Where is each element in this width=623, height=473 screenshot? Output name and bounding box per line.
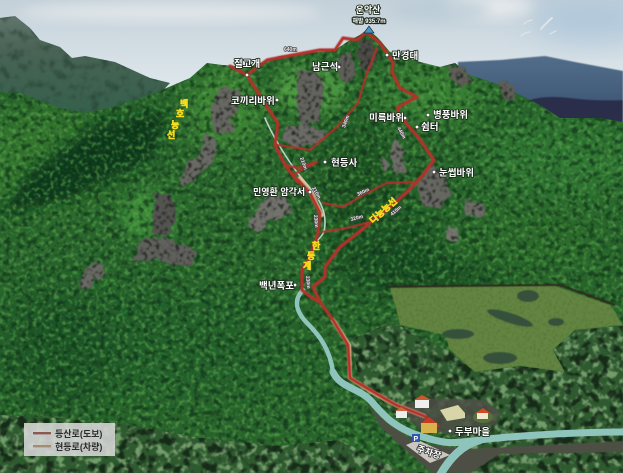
label: west ridge bbox=[167, 98, 188, 140]
rock: eyebrow rock bbox=[418, 164, 452, 208]
rock: east ledges bbox=[465, 200, 486, 216]
label: 민영환 암각서: 민영환 암각서 bbox=[253, 186, 305, 197]
rock: western crag upper bbox=[152, 194, 177, 236]
rock: temple crag bbox=[248, 196, 292, 232]
rock: left crag bbox=[178, 135, 218, 188]
label: course 1 bbox=[303, 240, 321, 271]
label: 쉼터: 쉼터 bbox=[421, 121, 438, 133]
label: 두부마을: 두부마을 bbox=[455, 427, 490, 438]
rock: small lower crag bbox=[78, 263, 104, 290]
distant mountain: right bbox=[458, 56, 623, 125]
sky bbox=[0, 0, 623, 140]
rock: elephant rock cluster bbox=[210, 88, 242, 134]
lowland forest bbox=[0, 322, 623, 473]
label: 남근석: 남근석 bbox=[312, 61, 338, 73]
label: 눈썹바위: 눈썹바위 bbox=[439, 167, 474, 179]
legend item: hiking trail: 등산로(도보) bbox=[55, 428, 102, 439]
rock: summit face bbox=[358, 40, 378, 72]
icon: birds bbox=[521, 18, 556, 36]
house: east bbox=[473, 408, 493, 423]
trail: temple spur bbox=[285, 162, 317, 182]
label: 쉼터 bbox=[415, 121, 438, 133]
trail distance labels: 340m bbox=[341, 114, 351, 129]
road: vehicle route bbox=[300, 178, 424, 416]
village ground and roads bbox=[368, 398, 623, 473]
terrain light and shadow bbox=[0, 65, 623, 410]
peak: summit marker: 해발 935.7m bbox=[352, 17, 386, 25]
icon: parking sign: P bbox=[414, 436, 418, 443]
label: course 1: 계 bbox=[303, 260, 311, 271]
rock: pinnacle bbox=[390, 138, 405, 172]
peak: summit marker: 운악산 bbox=[356, 4, 381, 15]
trail distance labels: 230m bbox=[304, 276, 311, 289]
label: 현등사: 현등사 bbox=[331, 157, 357, 169]
rock: ridge crag bbox=[448, 66, 472, 88]
trail distance labels: 320m bbox=[350, 214, 364, 223]
label: 코끼리바위: 코끼리바위 bbox=[231, 95, 275, 107]
rock: central columns bbox=[296, 70, 324, 126]
trail: western descent bbox=[247, 75, 298, 182]
rock: far ridge crag bbox=[498, 80, 516, 102]
trail distance labels: 360m bbox=[356, 187, 371, 198]
rock formations bbox=[78, 40, 516, 290]
label: 절고개: 절고개 bbox=[234, 58, 260, 70]
trail distance labels: 230m bbox=[312, 215, 319, 228]
house: large pale bbox=[440, 405, 465, 421]
rock: small pinnacle bbox=[382, 156, 390, 172]
rock: western crag lower bbox=[132, 238, 195, 266]
distant mountain: left bbox=[0, 16, 170, 113]
rock: central base bbox=[282, 124, 326, 148]
label: west ridge: 능 bbox=[171, 120, 179, 130]
label: 미륵바위: 미륵바위 bbox=[369, 112, 404, 124]
label: west ridge: 백 bbox=[180, 98, 188, 109]
trail distance labels: 640m bbox=[284, 47, 297, 53]
river bbox=[265, 118, 623, 473]
place labels bbox=[231, 50, 490, 438]
parking lot bbox=[406, 434, 450, 463]
label: west ridge: 호 bbox=[176, 109, 184, 119]
label: 만경대: 만경대 bbox=[392, 50, 418, 62]
label: course 2: 다능능선 bbox=[367, 195, 399, 225]
house: west bbox=[395, 407, 408, 418]
trail distance labels: 210m bbox=[298, 157, 308, 171]
trail distance labels: 210m bbox=[310, 186, 322, 201]
label: 백년폭포: 백년폭포 bbox=[259, 280, 294, 292]
house: golden bbox=[421, 417, 437, 433]
label: 병풍바위: 병풍바위 bbox=[433, 109, 468, 121]
trail: ridge and summit loop bbox=[230, 32, 434, 302]
trail distance labels: 410m bbox=[389, 204, 404, 218]
rock: upper column bbox=[338, 52, 356, 84]
rock: small east knob bbox=[447, 226, 458, 242]
parking lot: 주차장 bbox=[416, 443, 443, 461]
label: course 1: 동 bbox=[307, 251, 315, 261]
trail: summit connector bbox=[278, 48, 377, 150]
rock: small left outcrop bbox=[210, 140, 218, 154]
trail: upper cross path bbox=[323, 182, 413, 207]
yellow ridge labels bbox=[167, 98, 399, 271]
legend bbox=[24, 423, 115, 456]
meadow with tree clusters bbox=[388, 283, 623, 372]
label: course 1: 한 bbox=[312, 240, 321, 251]
label: 절고개 bbox=[234, 58, 260, 77]
peak: summit marker bbox=[352, 4, 386, 33]
trail: lower cross path bbox=[322, 222, 370, 232]
hiking trails bbox=[230, 32, 438, 426]
trail distance labels: 440m bbox=[395, 126, 407, 141]
legend item: vehicle road: 현등로(차량) bbox=[55, 441, 102, 452]
label: west ridge: 선 bbox=[167, 129, 175, 140]
trail: main valley route bbox=[298, 180, 438, 426]
trail distance labels bbox=[284, 47, 407, 289]
house: north bbox=[414, 395, 431, 408]
village houses bbox=[395, 395, 493, 433]
